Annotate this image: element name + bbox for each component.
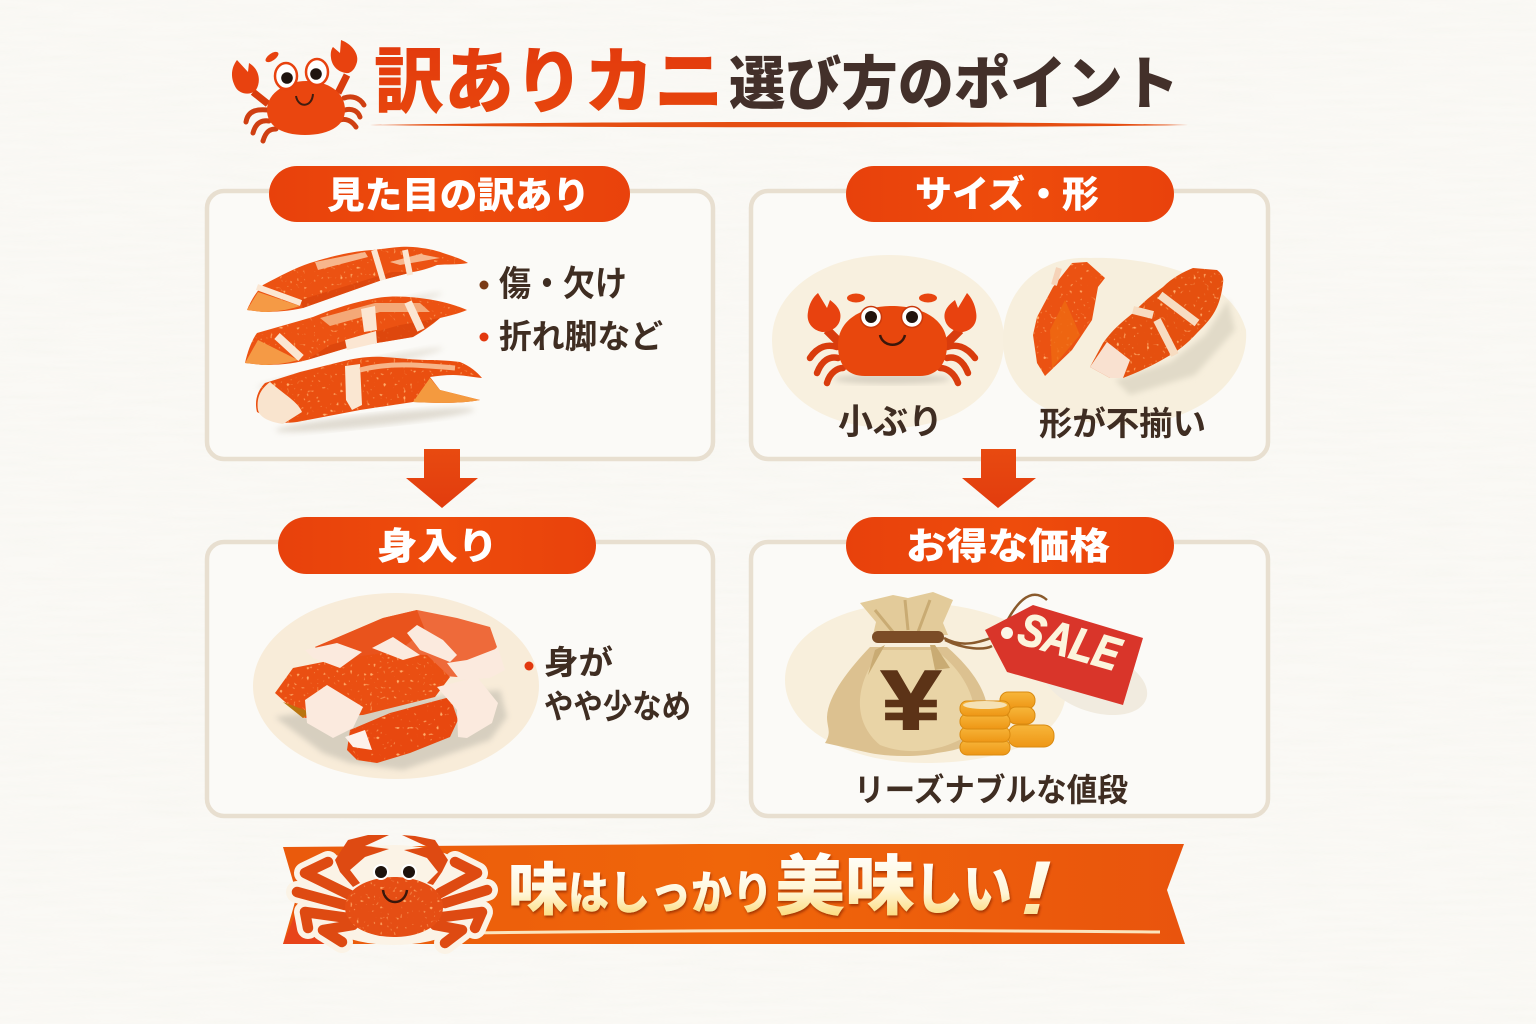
banner (283, 835, 1185, 945)
coins (960, 692, 1054, 755)
bullet text: 身が (544, 644, 613, 681)
heading pill: 身入り (377, 526, 498, 567)
bullet list: 傷・欠け (499, 265, 627, 304)
banner text (508, 846, 1052, 931)
bullet text: やや少なめ (544, 688, 691, 725)
panel frame (207, 542, 713, 816)
illustration: money bag with sale tag (785, 592, 1156, 763)
heading pill (278, 517, 596, 574)
banner text: ! (1020, 846, 1052, 931)
bullet list: 折れ脚など (499, 318, 663, 355)
arrow: left (406, 449, 478, 508)
banner text: 味 (508, 858, 568, 923)
illustration: crab meat on plate (253, 593, 539, 779)
banner text: しい (914, 858, 1012, 921)
panel: size and shape (751, 166, 1268, 459)
illustration: small crab (772, 255, 1004, 428)
title underline (370, 122, 1188, 127)
banner text: はしっかり (568, 867, 773, 919)
heading pill: サイズ・形 (915, 173, 1099, 215)
label: irregular shape: 形が不揃い (1039, 405, 1206, 442)
heading pill (846, 517, 1174, 574)
heading pill: お得な価格 (906, 526, 1110, 567)
panel frame (751, 191, 1268, 459)
banner text: 美味 (775, 849, 915, 923)
heading pill (269, 166, 630, 222)
title dark text: 選び方のポイント (729, 52, 1179, 117)
panel frame (751, 542, 1268, 816)
panel: good price (751, 517, 1268, 816)
illustration: irregular leg pieces (1003, 258, 1246, 425)
title (232, 40, 1188, 141)
illustration: money bag with sale tag: SALE (1013, 602, 1127, 681)
heading pill (846, 166, 1174, 222)
bullet text (524, 644, 691, 725)
illustration: money bag with sale tag: ¥ (881, 653, 941, 747)
label: small: 小ぶり (838, 403, 943, 442)
bullet list (480, 265, 663, 355)
panel: appearance (207, 166, 713, 459)
panel frame (207, 191, 713, 459)
illustration: three crab legs (245, 247, 482, 436)
arrow: right (962, 449, 1036, 508)
panel: meat filling (207, 517, 713, 816)
caption: リーズナブルな値段 (854, 772, 1128, 808)
icon: banner crab (297, 835, 487, 945)
icon: title crab (232, 40, 364, 141)
title red text: 訳ありカニ (374, 43, 724, 123)
ribbon (283, 844, 1185, 944)
heading pill: 見た目の訳あり (327, 175, 590, 216)
